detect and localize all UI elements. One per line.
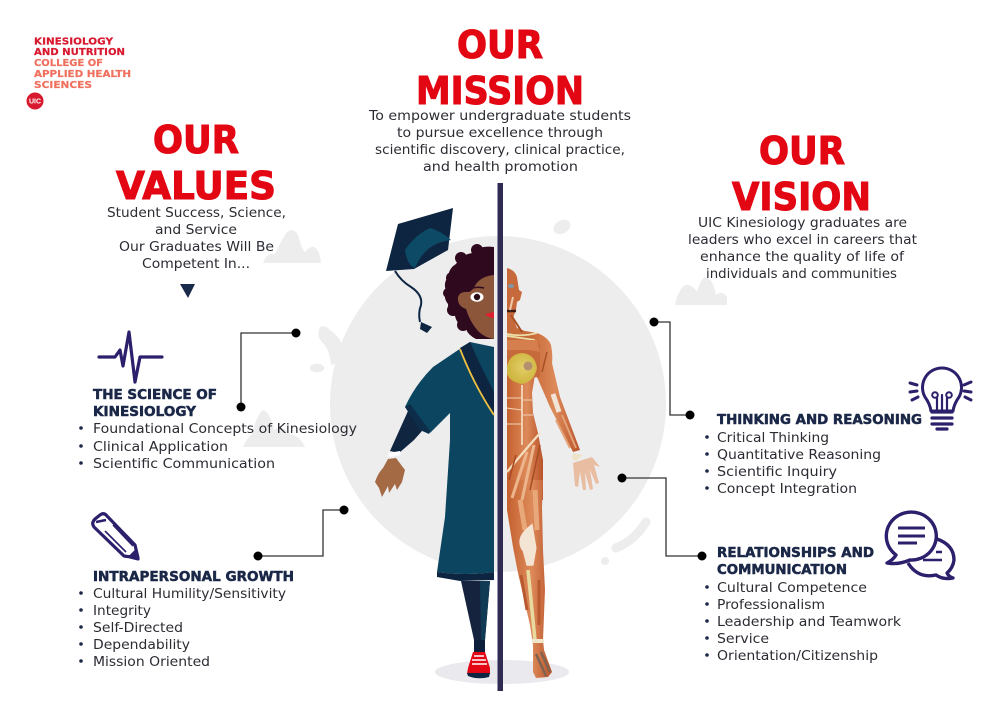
muscle arm [525,331,580,452]
panel: thinking and reasoning: Scientific Inquiry [717,464,837,480]
icon: light bulb [910,368,971,429]
hand [573,457,600,490]
panel: thinking and reasoning: Critical Thinking [717,430,829,446]
icon: heartbeat [99,332,162,382]
anatomy half figure [507,268,600,678]
panel: intrapersonal growth: Integrity [93,603,151,619]
floor shadow [435,660,569,684]
icon: speech bubbles [886,512,954,579]
panel: the science of kinesiology [79,388,357,472]
values text: Student Success, Science, [107,205,286,221]
muscle details [507,284,576,676]
mission text [368,108,631,175]
down arrow [180,284,195,298]
breast tissue [507,353,537,384]
icon: pencil [93,514,138,559]
left sleeve arm [390,411,422,453]
graduate half figure [375,208,494,678]
heading: our mission: MISSION [416,69,584,113]
panel: the science of kinesiology: Clinical Application [93,439,228,455]
panel: relationships and communication: COMMUNICATION [717,563,847,578]
collar [470,342,494,382]
panel: the science of kinesiology: Scientific Communication [93,456,275,472]
logo: AND NUTRITION [34,47,125,58]
panel: thinking and reasoning: Concept Integration [717,481,857,497]
panel: relationships and communication [705,546,901,664]
logo: KINESIOLOGY [34,36,114,48]
panel: thinking and reasoning: THINKING AND REASONING [717,413,922,428]
logo: COLLEGE OF [34,58,103,69]
panel: thinking and reasoning: Quantitative Reasoning [717,447,881,463]
panel: intrapersonal growth: Self-Directed [93,620,183,636]
mission text: to pursue excellence through [397,125,603,141]
graduation cap [386,208,453,333]
panel: the science of kinesiology: Foundational Concepts of Kinesiology [93,421,357,437]
heading: our vision: OUR [759,129,845,173]
panel: intrapersonal growth: INTRAPERSONAL GROWTH [93,570,294,585]
logo [26,36,131,110]
face [458,275,494,339]
leg [461,581,490,640]
heading: our mission [416,23,584,113]
vision text: enhance the quality of life of [700,249,905,265]
mission text: To empower undergraduate students [368,108,631,124]
gown [405,342,494,574]
heading: our values: VALUES [116,164,276,208]
values text: Our Graduates Will Be [119,239,274,255]
panel: intrapersonal growth: Dependability [93,637,190,653]
panel: thinking and reasoning [705,413,922,497]
logo: APPLIED HEALTH [34,69,131,80]
red shoe [467,652,490,678]
panel: intrapersonal growth [79,570,294,670]
heading: our mission: OUR [457,23,543,67]
panel: relationships and communication: RELATIONSHIPS AND [717,546,874,561]
connector: thinking and reasoning [650,318,694,420]
heading: our values: OUR [153,118,239,162]
muscle torso [507,375,543,500]
connector: intrapersonal growth [254,506,348,560]
panel: relationships and communication: Orientation/Citizenship [717,648,878,664]
values text: and Service [155,222,237,238]
connector: relationships and communication [618,474,706,560]
muscle head and neck [507,268,540,380]
panel: the science of kinesiology: KINESIOLOGY [93,405,197,420]
panel: relationships and communication: Service [717,631,769,647]
background circle and grey shapes [243,217,727,572]
panel: the science of kinesiology: THE SCIENCE OF [93,388,217,403]
heading: our values [116,118,276,208]
heading: our vision [732,129,871,219]
muscle leg [507,480,552,678]
vision text: leaders who excel in careers that [688,232,917,248]
vision text: individuals and communities [706,266,897,282]
mission text: and health promotion [423,159,578,175]
mission text: scientific discovery, clinical practice, [375,142,625,158]
logo: UIC [29,98,41,106]
panel: relationships and communication: Professionalism [717,597,825,613]
connector: science of kinesiology [236,328,300,412]
values text [107,205,286,272]
vision text: UIC Kinesiology graduates are [698,215,907,231]
centre divider bar [498,183,503,691]
hand [375,458,405,497]
panel: intrapersonal growth: Mission Oriented [93,654,210,670]
vision text [688,215,917,282]
values text: Competent In... [142,256,250,272]
heading: our vision: VISION [732,175,871,219]
panel: intrapersonal growth: Cultural Humility/Sensitivity [93,586,286,602]
panel: relationships and communication: Cultural Competence [717,580,867,596]
hair [443,244,494,339]
logo: SCIENCES [34,80,92,91]
panel: relationships and communication: Leadership and Teamwork [717,614,901,630]
